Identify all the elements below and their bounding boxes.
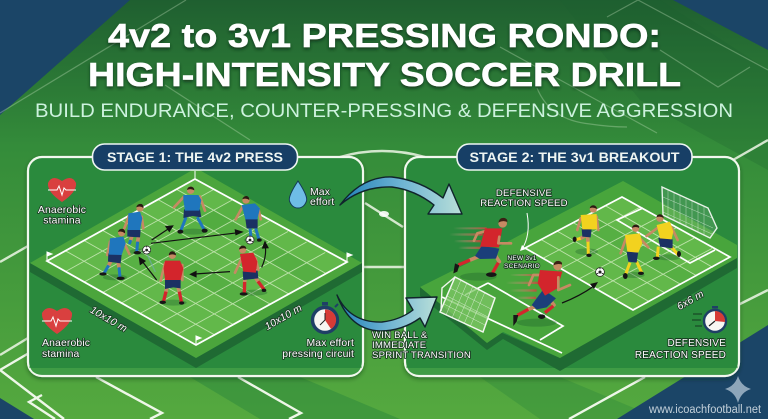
dimension left: 10x10 m	[88, 305, 129, 335]
label: anaerobic stamina top: stamina	[43, 216, 81, 226]
yellow players	[573, 205, 681, 279]
arrow: bottom transition	[337, 295, 437, 331]
ball: top right	[246, 236, 254, 244]
player: red runner 1	[453, 218, 511, 281]
arrow: top transition	[340, 177, 462, 214]
passing arrows	[139, 226, 268, 280]
stage 2 pill heading: STAGE 2: THE 3v1 BREAKOUT	[470, 150, 680, 165]
player: red runner 2	[513, 261, 570, 327]
icon: heart bottom	[42, 308, 72, 334]
label: anaerobic stamina top: Anaerobic	[38, 205, 86, 216]
centre spot	[379, 211, 389, 217]
label: new 3v1 scenario: SCENARIO	[504, 263, 540, 270]
panel: stage 2	[405, 144, 739, 376]
stage 1 pill heading: STAGE 1: THE 4v2 PRESS	[107, 150, 283, 165]
label: max effort: effort	[310, 197, 334, 208]
website credit: www.icoachfootball.net	[648, 404, 762, 416]
player: yellow 2	[621, 225, 648, 279]
icon: stopwatch left	[312, 302, 338, 332]
corner: top-right navy	[673, 0, 768, 50]
icon: heart top	[48, 178, 76, 202]
corner: bottom-left navy	[0, 398, 34, 419]
motion streaks: runner 2	[506, 274, 538, 299]
icon: sparkle	[725, 376, 751, 403]
dimension: 6x6 m	[675, 289, 706, 313]
arrow: dribble	[562, 282, 598, 303]
label: defensive reaction speed top: REACTION SPEED	[480, 198, 568, 209]
title	[88, 17, 681, 93]
player: blue back-left	[124, 204, 151, 255]
ball: near blue pair	[143, 246, 151, 254]
label: max effort: Max	[310, 187, 331, 198]
corner: top-left navy	[0, 0, 130, 115]
goal: near	[440, 277, 495, 332]
player: yellow 3	[647, 214, 681, 260]
panel: stage 1	[28, 144, 363, 376]
label: win ball transition: WIN BALL &	[372, 330, 428, 341]
label: win ball transition: IMMEDIATE	[372, 340, 426, 351]
goal: far	[662, 187, 717, 238]
stage 2 pill heading	[457, 144, 692, 170]
player: blue top-centre	[174, 187, 208, 235]
white pitch lines	[0, 140, 768, 419]
player: red right	[235, 246, 267, 296]
label: defensive reaction speed bottom: REACTION SPEED	[635, 350, 726, 361]
title: HIGH-INTENSITY SOCCER DRILL	[88, 56, 681, 93]
arrow: reaction curve	[520, 213, 528, 251]
red runners	[449, 218, 570, 327]
label: win ball transition: SPRINT TRANSITION	[372, 350, 471, 361]
label: max effort pressing circuit: Max effort	[306, 338, 354, 349]
ball	[596, 268, 604, 276]
subtitle: BUILD ENDURANCE, COUNTER-PRESSING & DEFENSIVE AGGRESSION	[35, 100, 733, 122]
label: max effort pressing circuit: pressing circuit	[282, 349, 354, 360]
stage 1 field	[30, 168, 362, 368]
player: blue front-left	[99, 229, 129, 280]
player: red centre	[159, 251, 187, 306]
label: anaerobic stamina bottom: stamina	[42, 349, 80, 360]
icon: water drop	[289, 181, 307, 208]
player: yellow 1	[573, 205, 598, 257]
stage 1 pill heading	[92, 144, 298, 170]
stage 2 field	[420, 181, 737, 371]
player: blue top-right	[236, 196, 263, 243]
corner: bottom-right navy	[617, 325, 768, 419]
players and passes: stage 1	[99, 187, 268, 306]
label: anaerobic stamina bottom: Anaerobic	[42, 338, 90, 349]
label: defensive reaction speed bottom: DEFENSIVE	[668, 338, 726, 349]
icon: stopwatch right	[692, 306, 726, 332]
label: new 3v1 scenario: NEW 3v1	[507, 255, 537, 262]
faint pitch markings	[0, 0, 768, 140]
label: defensive reaction speed top: DEFENSIVE	[496, 188, 552, 199]
dimension right: 10x10 m	[263, 303, 304, 333]
title: 4v2 to 3v1 PRESSING RONDO:	[108, 17, 661, 54]
motion streaks: runner 1	[449, 227, 487, 249]
